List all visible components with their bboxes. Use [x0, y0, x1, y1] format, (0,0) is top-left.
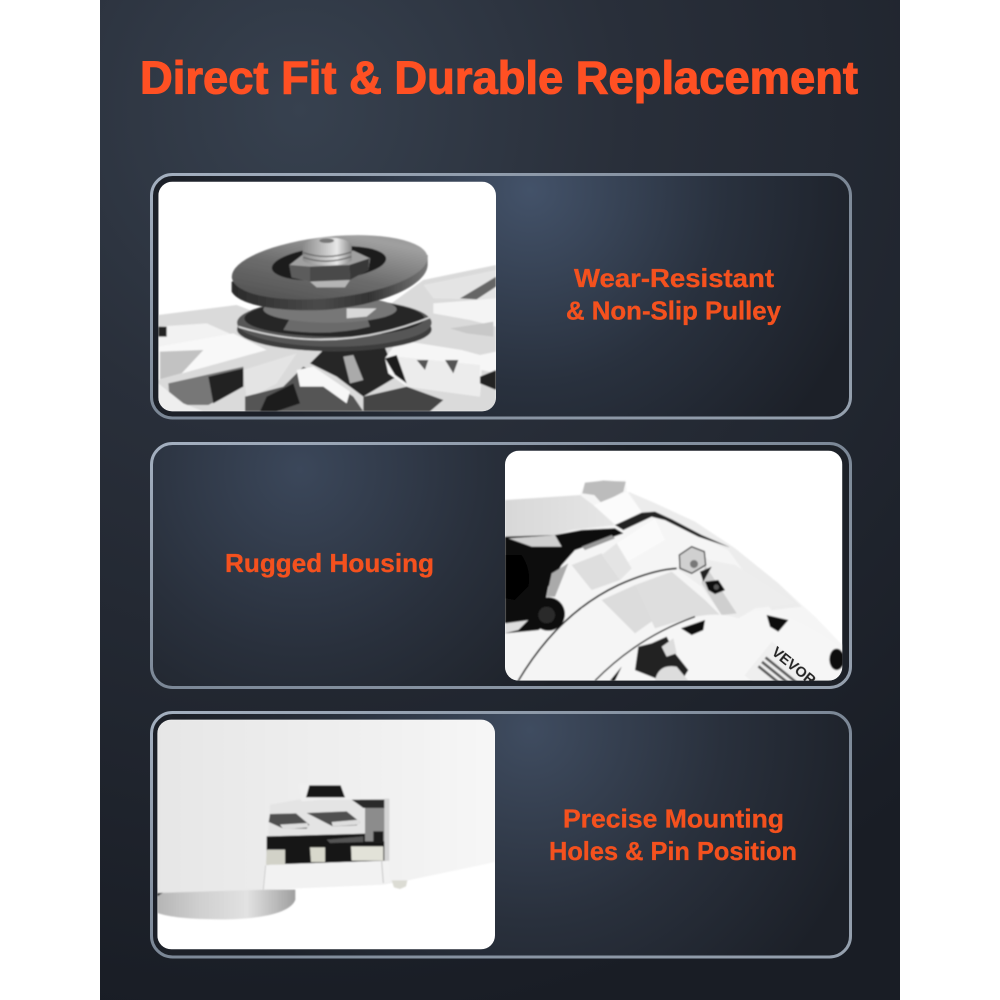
label backing [752, 656, 818, 681]
reflective bands [572, 553, 620, 590]
photo: pulley on chrome alternator [158, 182, 496, 411]
lower boss [157, 890, 295, 919]
housing body [157, 720, 495, 893]
pins [266, 850, 285, 865]
VEVOR label: VEVOR [768, 644, 819, 689]
end plate [694, 614, 842, 666]
caption: wear-resistant pulley: Wear-Resistant [574, 263, 774, 293]
upper pulley disc [232, 255, 428, 310]
bolt bracket [677, 547, 795, 618]
photo: mounting holes and pins [157, 720, 495, 949]
chrome fan body [158, 265, 496, 411]
panel: rugged housing [152, 444, 850, 713]
background panel [100, 0, 900, 1000]
recess window [280, 800, 365, 835]
lower lip [370, 860, 388, 862]
center nut [635, 637, 688, 681]
photo: chrome alternator housing [505, 450, 842, 681]
lower pulley disc [236, 326, 432, 352]
seam line [518, 568, 677, 681]
caption: mounting holes and pin position [549, 804, 797, 866]
hub under upper disc [262, 299, 398, 322]
threaded stud [303, 238, 352, 265]
dark chrome reflection [505, 528, 623, 633]
terminal blades [269, 813, 309, 829]
caption: mounting holes and pin position: Holes & Pin Position [549, 836, 797, 866]
title: Direct Fit & Durable Replacement [140, 52, 858, 104]
caption: rugged housing: Rugged Housing [225, 548, 434, 578]
caption: wear-resistant pulley: & Non-Slip Pulley [566, 296, 782, 326]
caption: mounting holes and pin position: Precise Mounting [563, 804, 784, 834]
caption: wear-resistant pulley [566, 263, 782, 326]
panel: wear-resistant pulley [152, 174, 850, 418]
hex nut [288, 250, 372, 276]
housing silhouette [505, 481, 842, 681]
top notch [298, 782, 360, 801]
panel: precise mounting holes [152, 712, 850, 957]
